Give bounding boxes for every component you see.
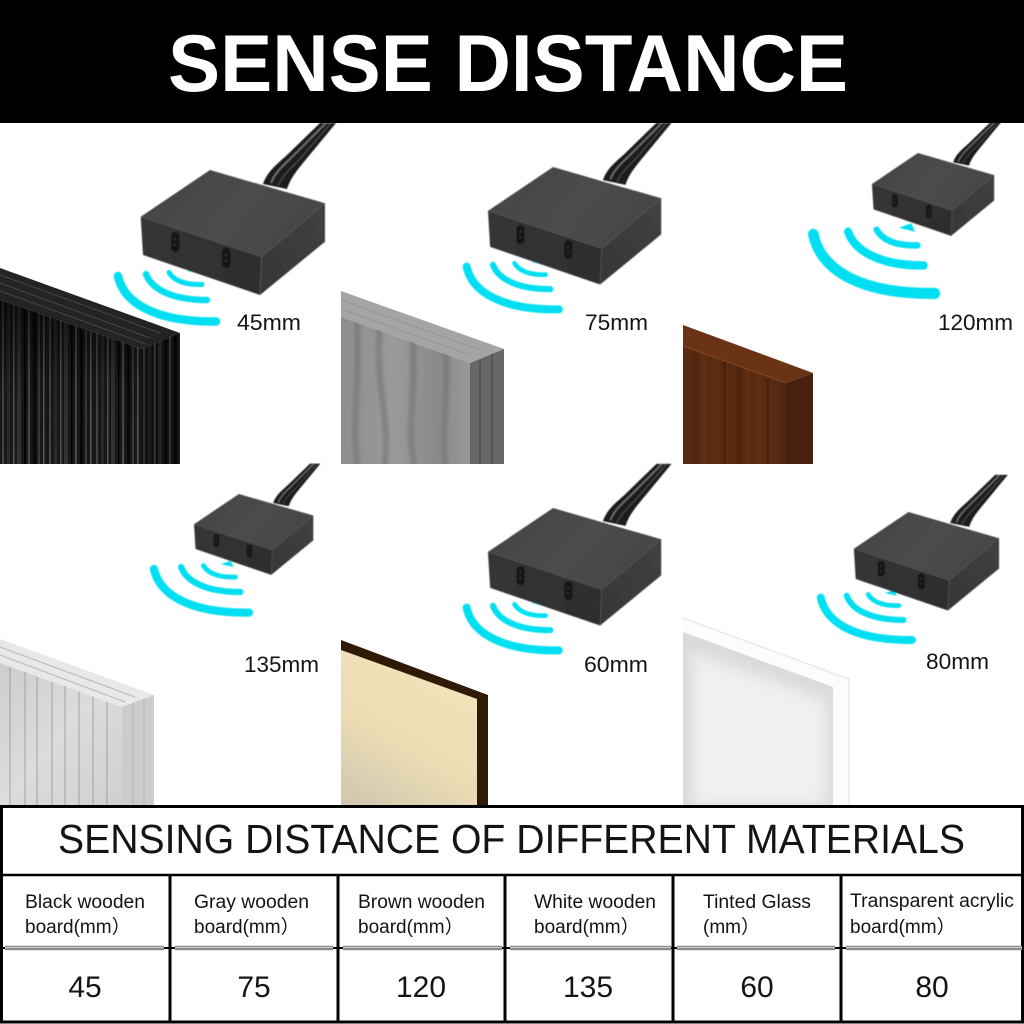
column 3 heading: Brown wooden bbox=[358, 892, 485, 913]
sensor 1 with signal waves bbox=[118, 123, 336, 322]
board: gray wood bbox=[341, 291, 504, 470]
column 6 heading: Transparent acrylic bbox=[850, 891, 1014, 912]
value 45: 45 bbox=[68, 971, 102, 1004]
column 5 heading bbox=[703, 892, 811, 938]
table title: SENSING DISTANCE OF DIFFERENT MATERIALS bbox=[58, 816, 965, 862]
column 5 heading: (mm） bbox=[703, 916, 760, 938]
column 6 heading: board(mm） bbox=[850, 916, 956, 938]
column 1 heading bbox=[25, 892, 145, 938]
board: transparent acrylic bbox=[683, 618, 849, 806]
column 2 heading: Gray wooden bbox=[194, 892, 309, 913]
column 4 heading bbox=[534, 892, 656, 938]
value 60: 60 bbox=[740, 971, 774, 1004]
label: 135mm: 135mm bbox=[244, 652, 319, 677]
column 3 heading bbox=[358, 892, 485, 938]
sensor 6 with signal waves bbox=[821, 475, 1008, 640]
label: 60mm: 60mm bbox=[584, 652, 648, 677]
board: brown wood bbox=[683, 325, 813, 464]
column 3 heading: board(mm） bbox=[358, 916, 464, 938]
column 1 heading: board(mm） bbox=[25, 916, 131, 938]
board: tinted glass bbox=[341, 640, 488, 806]
column 4 heading: board(mm） bbox=[534, 916, 640, 938]
label: 75mm: 75mm bbox=[585, 310, 648, 335]
sensor 2 with signal waves bbox=[467, 123, 672, 309]
column 6 heading bbox=[850, 891, 1014, 938]
column 2 heading: board(mm） bbox=[194, 916, 300, 938]
sensor 4 with signal waves bbox=[154, 464, 320, 613]
sensor 5 with signal waves bbox=[467, 464, 672, 650]
sensor 3 with signal waves bbox=[813, 122, 1001, 293]
data table bbox=[0, 806, 1024, 1024]
value 135: 135 bbox=[563, 971, 613, 1004]
label: 45mm: 45mm bbox=[237, 310, 301, 335]
label: 120mm: 120mm bbox=[938, 310, 1013, 335]
column 4 heading: White wooden bbox=[534, 892, 656, 913]
main title: SENSE DISTANCE bbox=[168, 19, 848, 109]
board: white wood bbox=[0, 639, 154, 806]
column 1 heading: Black wooden bbox=[25, 892, 145, 913]
header banner bbox=[0, 0, 1024, 123]
column 5 heading: Tinted Glass bbox=[703, 892, 811, 913]
column 2 heading bbox=[194, 892, 309, 938]
value 75: 75 bbox=[237, 971, 271, 1004]
label: 80mm: 80mm bbox=[926, 649, 989, 674]
board: black wood bbox=[0, 268, 180, 464]
value 120: 120 bbox=[396, 971, 446, 1004]
value 80: 80 bbox=[915, 971, 949, 1004]
